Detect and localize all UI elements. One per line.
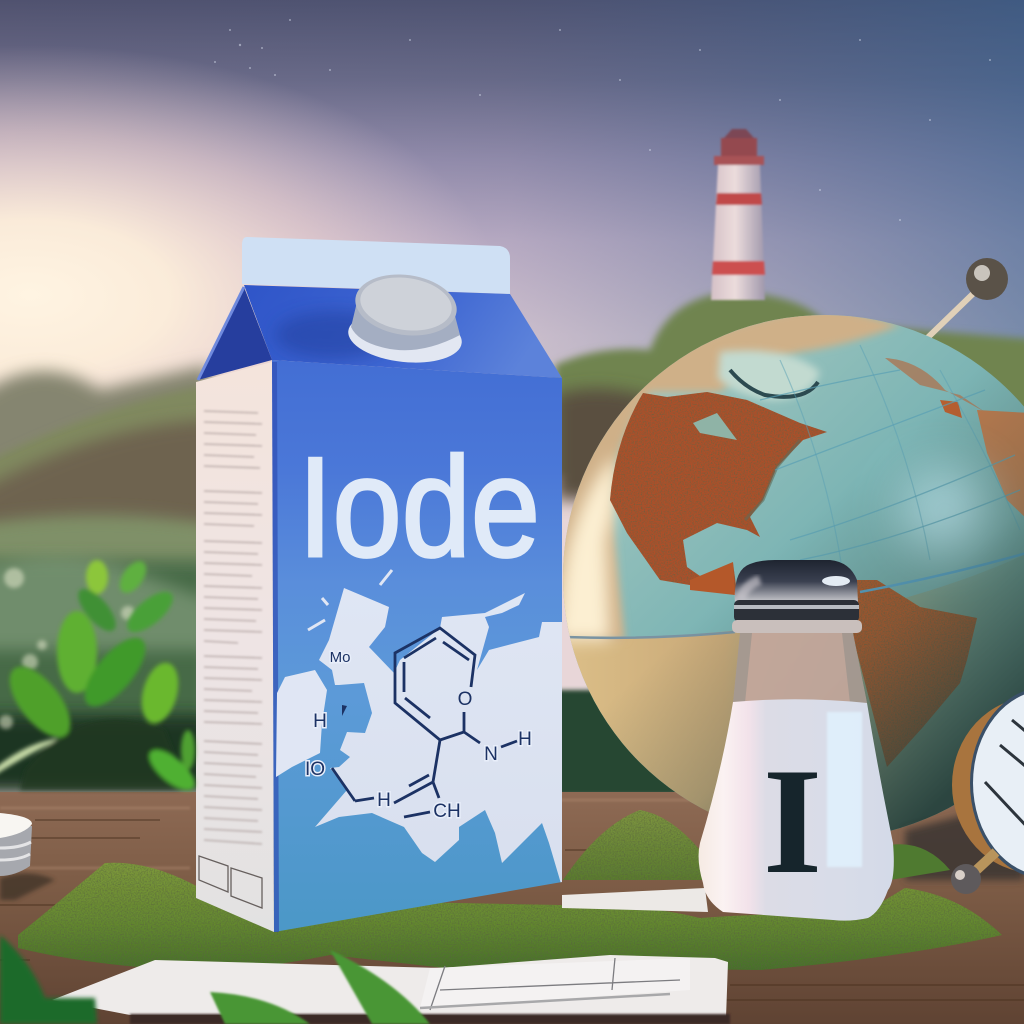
letter I: I <box>763 737 822 905</box>
side panel <box>196 362 274 932</box>
map on carton front <box>276 570 562 887</box>
central america <box>690 562 735 595</box>
africa edge continent <box>977 410 1024 522</box>
small islands <box>308 570 392 630</box>
bokeh dots <box>0 568 135 729</box>
gauge pin <box>970 852 996 876</box>
chemical labels: N <box>484 744 498 765</box>
milk carton <box>196 237 562 932</box>
carton cap <box>346 268 464 368</box>
chemical labels: H <box>377 790 391 811</box>
papers <box>52 955 730 1024</box>
cap shadow <box>275 311 395 359</box>
background hills and foliage <box>0 292 1024 795</box>
chemical labels: O <box>458 689 472 710</box>
stack of plates <box>0 813 32 876</box>
hudson bay <box>693 413 737 440</box>
foreground leaves left <box>0 557 201 797</box>
carton title: Iode <box>298 428 540 587</box>
latitude lines <box>760 370 1020 560</box>
shaker collar <box>734 600 859 622</box>
chemical labels: CH <box>433 801 461 822</box>
chemical labels: H <box>313 711 327 732</box>
front left edge <box>272 362 279 932</box>
gable side <box>198 287 272 380</box>
carton front panel <box>272 360 562 932</box>
chemical labels <box>305 649 532 822</box>
shaker glass body <box>733 633 867 703</box>
foreground leaves bottom <box>0 935 430 1024</box>
moss ground <box>18 810 1002 972</box>
gable roof <box>244 285 562 378</box>
shadow under globe <box>905 800 1024 880</box>
side panel text lines <box>204 411 262 844</box>
salt shaker <box>699 560 894 921</box>
south america continent <box>853 580 977 767</box>
north america continent <box>610 392 827 593</box>
stars <box>214 19 991 221</box>
warm lower hemisphere <box>570 556 1024 812</box>
chemical labels: IO <box>305 759 325 780</box>
ireland <box>276 670 327 777</box>
chemical labels: Mo <box>330 649 350 666</box>
warm rim <box>550 305 900 640</box>
globe <box>550 305 1024 850</box>
table <box>0 792 1024 1024</box>
sky background <box>0 0 1024 800</box>
arctic curve <box>730 370 818 397</box>
carton top fold <box>242 237 510 294</box>
lighthouse <box>711 129 765 300</box>
chemical labels: H <box>518 729 532 750</box>
milk highlight <box>827 712 862 867</box>
globe highlight <box>903 470 987 554</box>
shaker metal lid <box>735 560 858 603</box>
pale arctic <box>718 351 820 400</box>
antenna pin on globe <box>918 258 1008 347</box>
paper behind shaker <box>562 888 708 912</box>
milk fill <box>699 699 894 921</box>
atlantic coast shadow <box>745 440 800 520</box>
chemical structure <box>332 628 517 817</box>
gauge instrument <box>951 687 1024 894</box>
equator <box>565 632 735 638</box>
side panel barcode boxes <box>199 856 262 908</box>
cream highlight <box>555 455 616 640</box>
